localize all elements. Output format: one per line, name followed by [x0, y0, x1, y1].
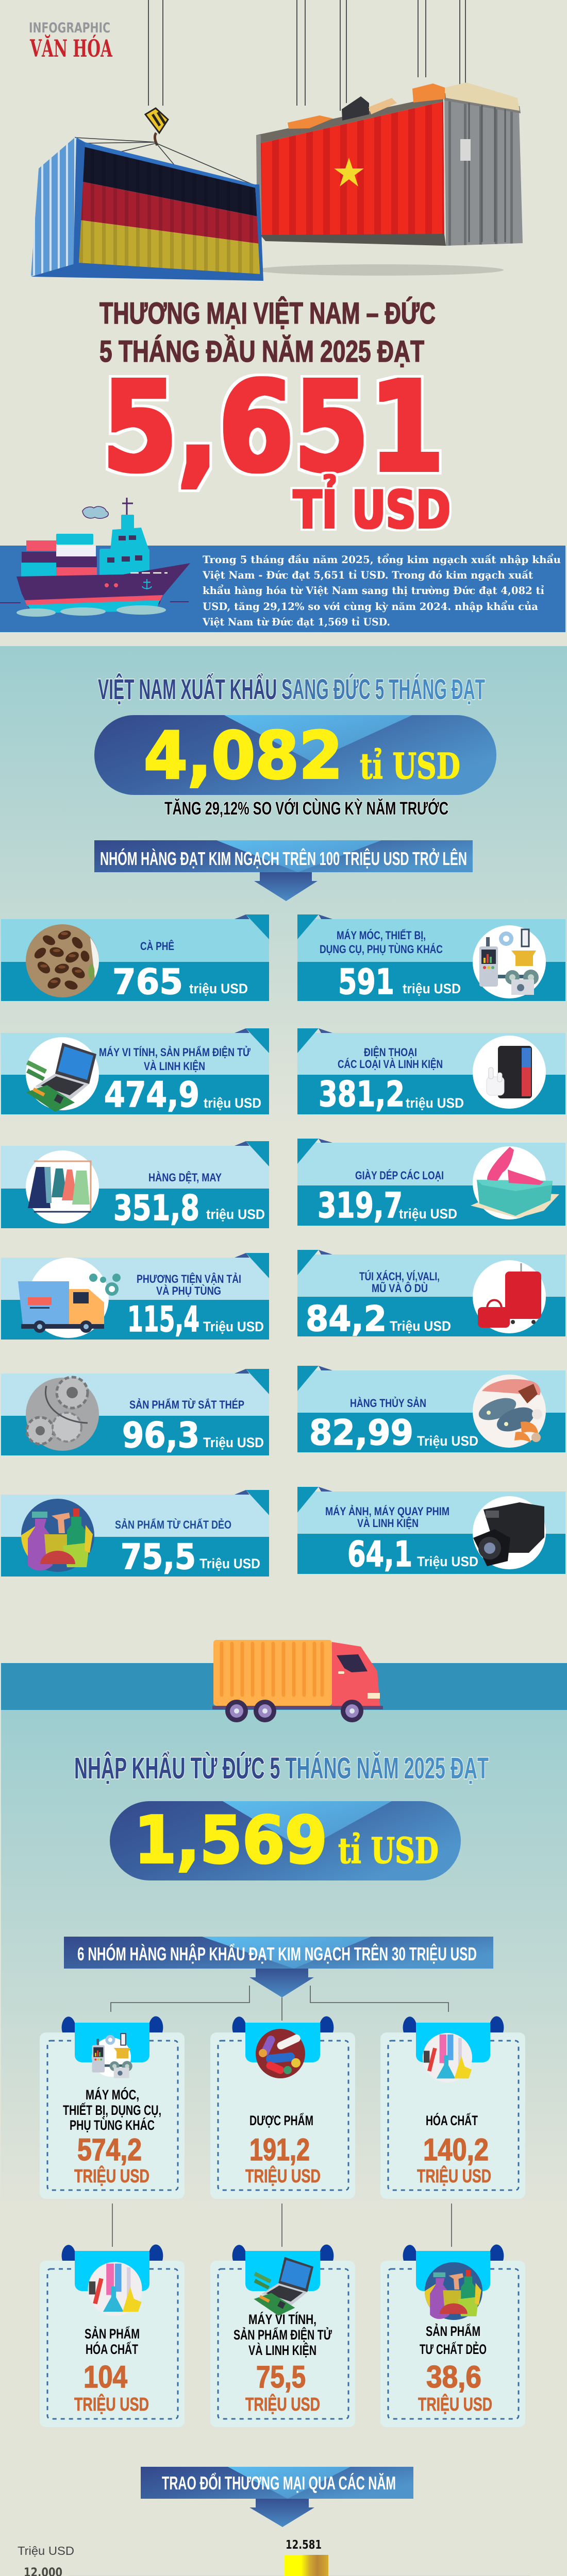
- bars: [124, 2555, 491, 2576]
- icon: delivery truck: [18, 1258, 121, 1338]
- card: phones: 381,2: [319, 1074, 405, 1115]
- card: footwear: [297, 1139, 565, 1226]
- card: footwear: GIÀY DÉP CÁC LOẠI: [355, 1169, 444, 1182]
- logo: Infographic Văn Hóa: [29, 20, 113, 62]
- panel: export section background: [0, 646, 567, 1133]
- export value pill: tỉ USD: [360, 746, 460, 787]
- import card: machinery: TRIỆU USD: [74, 2165, 149, 2187]
- card: vehicles: PHƯƠNG TIỆN VẬN TẢI: [137, 1273, 241, 1285]
- import card: machinery: PHỤ TÙNG KHÁC: [70, 2117, 155, 2133]
- icon: laptop: [254, 2257, 313, 2316]
- import card: pharma: TRIỆU USD: [245, 2165, 321, 2187]
- card: bags: TÚI XÁCH, VÍ,VALI,: [359, 1270, 440, 1283]
- import card: chemicals: 140,2: [423, 2132, 489, 2167]
- card: vehicles: [1, 1253, 269, 1340]
- card: bags: MŨ VÀ Ô DÙ: [372, 1282, 428, 1295]
- icon: plastic bottles: [425, 2262, 482, 2320]
- card: seafood: [297, 1366, 565, 1453]
- card: bags: Triệu USD: [390, 1318, 451, 1334]
- import card: chemical products: 104: [84, 2360, 128, 2394]
- icon: seafood: [473, 1375, 546, 1448]
- title: 5 THÁNG ĐẦU NĂM 2025 ĐẠT: [99, 335, 424, 368]
- import value pill: [110, 1801, 461, 1880]
- icon: steel gears: [26, 1377, 99, 1451]
- card: steel: [1, 1369, 269, 1456]
- panel: import section background: [1, 1710, 567, 2215]
- summary text: Việt Nam - Đức đạt 5,651 tỉ USD. Trong đó kim ngạch xuất: [202, 569, 533, 581]
- card: phones: triệu USD: [406, 1095, 464, 1111]
- card: plastics: Triệu USD: [199, 1556, 260, 1571]
- import card: computers: VÀ LINH KIỆN: [248, 2342, 316, 2358]
- card: vehicles: 115,4: [127, 1299, 199, 1340]
- card: cameras: 64,1: [347, 1534, 412, 1575]
- icon: machinery: [473, 925, 546, 998]
- axis title: Triệu USD: [18, 2544, 74, 2557]
- summary bar: [0, 546, 565, 632]
- big total value: 5,651: [102, 355, 444, 499]
- illustration: containers hanging from cranes: [31, 0, 523, 281]
- summary text: Việt Nam từ Đức đạt 1,569 tỉ USD.: [202, 616, 390, 628]
- card: steel: Triệu USD: [203, 1435, 264, 1450]
- card: seafood: Triệu USD: [417, 1433, 478, 1449]
- Vietnam container shadow: [256, 264, 504, 276]
- import card: chemical products: SẢN PHẨM: [85, 2325, 140, 2342]
- card: phones: ĐIỆN THOẠI: [364, 1046, 417, 1059]
- summary text: Trong 5 tháng đầu năm 2025, tổng kim ngạch xuất nhập khẩu: [203, 553, 561, 566]
- card: vehicles: Triệu USD: [203, 1319, 264, 1334]
- card: footwear: 319,7: [318, 1185, 403, 1226]
- card: machinery: 591: [338, 962, 394, 1003]
- card: machinery: MÁY MÓC, THIẾT BỊ,: [337, 929, 426, 942]
- band behind truck: [1, 1663, 567, 1710]
- card: seafood: 82,99: [309, 1413, 413, 1453]
- card: seafood: HÀNG THỦY SẢN: [350, 1397, 426, 1410]
- title: THƯƠNG MẠI VIỆT NAM – ĐỨC: [99, 297, 436, 330]
- icon: chemistry flasks: [88, 2262, 142, 2316]
- export value pill: [94, 715, 496, 795]
- bar chart: trade by year: [18, 2538, 530, 2576]
- summary text: khẩu hàng hóa từ Việt Nam sang thị trường Đức đạt 4,082 tỉ: [203, 584, 544, 597]
- card: bags: 84,2: [306, 1299, 387, 1340]
- card: coffee: [1, 914, 269, 1003]
- icon: shoes on a box: [471, 1146, 559, 1219]
- value labels: 12.581: [286, 2538, 322, 2552]
- card: textiles: 351,8: [113, 1188, 199, 1229]
- icon: clothes rack: [26, 1150, 99, 1224]
- import card: chemicals: [380, 2016, 525, 2199]
- import card: plastics: 38,6: [426, 2360, 481, 2394]
- import card: computers: 75,5: [256, 2360, 306, 2394]
- import card: plastics: [380, 2245, 525, 2427]
- card: machinery: [297, 914, 565, 1003]
- card: computers: VÀ LINH KIỆN: [144, 1060, 205, 1073]
- summary text: [202, 553, 561, 628]
- title: [99, 297, 436, 368]
- import card: computers: SẢN PHẨM ĐIỆN TỬ: [234, 2326, 332, 2343]
- icon: pills: [256, 2029, 305, 2078]
- import card: pharma: [210, 2016, 355, 2199]
- icon: orange truck: [212, 1640, 383, 1722]
- import card: computers: TRIỆU USD: [245, 2393, 320, 2415]
- import card: pharma: DƯỢC PHẨM: [249, 2112, 313, 2128]
- card: computers: 474,9: [104, 1075, 199, 1115]
- import card: computers: MÁY VI TÍNH,: [248, 2311, 316, 2327]
- Germany flag container: [31, 137, 263, 281]
- import value pill: tỉ USD: [338, 1831, 439, 1872]
- icon: phone and earbuds: [473, 1036, 546, 1109]
- card: plastics: SẢN PHẨM TỪ CHẤT DẺO: [115, 1518, 231, 1531]
- icon: luggage: [473, 1260, 546, 1333]
- card: textiles: [1, 1141, 269, 1229]
- card: steel: 96,3: [122, 1415, 199, 1456]
- summary text: USD, tăng 29,12% so với cùng kỳ năm 2024. nhập khẩu của: [203, 600, 538, 613]
- card: phones: [297, 1028, 565, 1115]
- import card: chemicals: HÓA CHẤT: [426, 2112, 478, 2128]
- icon: laptop: [26, 1037, 99, 1112]
- card: cameras: [297, 1487, 565, 1575]
- logo: Infographic Văn Hóa: VĂN HÓA: [29, 34, 113, 62]
- card: computers: triệu USD: [204, 1095, 261, 1111]
- import card: chemical products: TRIỆU USD: [74, 2393, 149, 2415]
- import card: machinery: 574,2: [77, 2132, 142, 2167]
- card: coffee: CÀ PHÊ: [140, 940, 174, 953]
- big total value: TỈ USD: [293, 474, 451, 540]
- import card: machinery: MÁY MÓC,: [86, 2087, 139, 2103]
- card: footwear: triệu USD: [399, 1206, 457, 1222]
- card: steel: SẢN PHẨM TỪ SẮT THÉP: [129, 1398, 244, 1411]
- card: cameras: Triệu USD: [417, 1554, 478, 1569]
- import card: computers: [210, 2245, 355, 2427]
- export value pill: 4,082: [144, 718, 343, 793]
- card: plastics: 75,5: [121, 1537, 196, 1578]
- import card: pharma: 191,2: [249, 2132, 310, 2167]
- card: machinery: triệu USD: [403, 981, 461, 996]
- icon: plastic bottles: [21, 1499, 94, 1572]
- card: vehicles: VÀ PHỤ TÙNG: [156, 1284, 221, 1297]
- card: textiles: triệu USD: [206, 1207, 265, 1222]
- card: coffee: triệu USD: [189, 981, 248, 996]
- import card: chemical products: [40, 2245, 185, 2427]
- card: computers: MÁY VI TÍNH, SẢN PHẨM ĐIỆN TỬ: [99, 1046, 251, 1059]
- icon: cargo ship: [0, 498, 190, 617]
- card: machinery: DỤNG CỤ, PHỤ TÙNG KHÁC: [320, 943, 443, 956]
- import card: plastics: TRIỆU USD: [418, 2393, 492, 2415]
- card: textiles: HÀNG DỆT, MAY: [148, 1171, 222, 1184]
- icon: video camera: [473, 1496, 546, 1569]
- banner: trade by year: [141, 2467, 413, 2527]
- crane hook: [145, 108, 168, 145]
- icon: machinery: [92, 2033, 132, 2078]
- card: cameras: VÀ LINH KIỆN: [357, 1517, 419, 1530]
- import card: plastics: TƯ CHẤT DẺO: [420, 2341, 487, 2357]
- card: computers: [1, 1028, 269, 1115]
- import card: chemical products: HÓA CHẤT: [86, 2341, 138, 2357]
- card: coffee: 765: [112, 962, 183, 1003]
- banner: trade by year: TRAO ĐỔI THƯƠNG MẠI QUA CÁC NĂM: [162, 2471, 396, 2494]
- logo: Infographic Văn Hóa: INFOGRAPHIC: [29, 20, 110, 36]
- banner: export groups: [94, 840, 473, 901]
- import card: plastics: SẢN PHẨM: [426, 2323, 480, 2339]
- banner: import groups: [64, 1937, 493, 1997]
- import value pill: 1,569: [134, 1802, 327, 1878]
- cables: [148, 0, 465, 111]
- icon: coffee beans: [26, 924, 99, 997]
- import card: chemicals: TRIỆU USD: [417, 2165, 491, 2187]
- card: plastics: [1, 1490, 269, 1578]
- connectors: [111, 1986, 452, 2247]
- import card: machinery: THIẾT BỊ, DỤNG CỤ,: [63, 2102, 161, 2118]
- Vietnam flag container: [256, 82, 523, 246]
- import card: machinery: [40, 2016, 185, 2199]
- growth note: TĂNG 29,12% SO VỚI CÙNG KỲ NĂM TRƯỚC: [164, 798, 448, 819]
- card: bags: [297, 1250, 565, 1340]
- icon: chemistry flasks: [423, 2033, 472, 2082]
- card: cameras: MÁY ẢNH, MÁY QUAY PHIM: [325, 1505, 449, 1518]
- card: phones: CÁC LOẠI VÀ LINH KIỆN: [338, 1058, 443, 1071]
